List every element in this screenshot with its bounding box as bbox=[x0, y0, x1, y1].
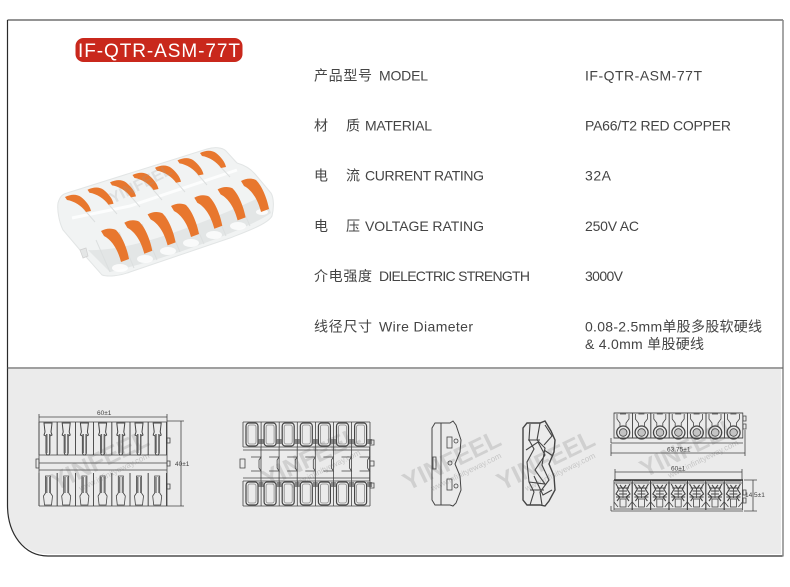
spec row: current rating: CURRENT RATING bbox=[365, 168, 484, 184]
watermark 5: www.infinityeway.com bbox=[666, 438, 740, 480]
drawing: section view bbox=[523, 421, 555, 506]
spec row: dielectric strength bbox=[314, 268, 624, 284]
spec row: voltage rating: VOLTAGE RATING bbox=[365, 218, 484, 234]
title badge: IF-QTR-ASM-77T bbox=[78, 41, 240, 62]
spec row: voltage rating: 电 bbox=[314, 218, 328, 234]
product photo: transparent connector bbox=[58, 148, 273, 276]
spec row: current rating bbox=[314, 168, 612, 184]
spec row: dielectric strength: 3000V bbox=[585, 268, 624, 284]
drawing: top view with dimensions bbox=[36, 410, 190, 506]
watermark 3: www.infinityeway.com bbox=[429, 451, 503, 493]
width dimension: 60±1 bbox=[671, 466, 686, 472]
spec row: voltage rating: 250V AC bbox=[585, 218, 639, 234]
spec row: wire diameter: Wire Diameter bbox=[379, 318, 473, 334]
spec row: wire diameter: & 4.0mm 单股硬线 bbox=[585, 336, 704, 352]
spec row: material bbox=[314, 118, 731, 134]
height dimension bbox=[167, 421, 190, 506]
spec row: voltage rating bbox=[314, 218, 639, 234]
spec row: material: 质 bbox=[346, 118, 360, 134]
front row orange levers bbox=[101, 179, 269, 262]
watermark 2: YINFEEL bbox=[257, 422, 365, 493]
watermark 5: YINFEEL bbox=[635, 412, 743, 483]
drawing: front elevation with dimension bbox=[611, 413, 746, 456]
spec row: model: 产品型号 bbox=[314, 68, 372, 84]
spec row: model bbox=[314, 68, 702, 84]
row groove bbox=[72, 170, 237, 218]
spec row: model: IF-QTR-ASM-77T bbox=[585, 68, 702, 84]
rear row orange levers bbox=[65, 151, 226, 212]
watermark 4: YINFEEL bbox=[492, 425, 600, 496]
photo watermark: YINFEEL bbox=[107, 162, 175, 208]
height dimension: 40±1 bbox=[175, 461, 190, 468]
drawing: side view bbox=[432, 421, 461, 506]
lower shading bbox=[88, 195, 271, 272]
width dimension bbox=[615, 466, 742, 480]
spec row: voltage rating: 压 bbox=[346, 218, 360, 234]
spec row: dielectric strength: DIELECTRIC STRENGTH bbox=[379, 268, 530, 284]
drawing: bottom view bbox=[240, 422, 374, 506]
watermark 1: YINFEEL bbox=[46, 425, 154, 496]
height dimension bbox=[744, 480, 765, 511]
spec row: model: MODEL bbox=[379, 68, 428, 84]
locking tab bbox=[80, 248, 88, 258]
spec row: material: 材 bbox=[314, 118, 328, 134]
spec row: wire diameter: 0.08-2.5mm单股多股软硬线 bbox=[585, 318, 762, 334]
spec row: wire diameter bbox=[314, 318, 762, 352]
watermark 3: YINFEEL bbox=[398, 425, 506, 496]
watermark 2: www.infinityeway.com bbox=[288, 448, 362, 490]
spec row: current rating: 流 bbox=[346, 168, 360, 184]
width dimension bbox=[39, 410, 167, 422]
spec row: material: PA66/T2 RED COPPER bbox=[585, 118, 731, 134]
spec row: current rating: 电 bbox=[314, 168, 328, 184]
spec row: wire diameter: 线径尺寸 bbox=[314, 318, 372, 334]
spec row: material: MATERIAL bbox=[365, 118, 432, 134]
length dimension: 63.75±1 bbox=[667, 446, 691, 454]
height dimension: 14.5±1 bbox=[745, 492, 765, 499]
watermark 4: www.infinityeway.com bbox=[523, 451, 597, 493]
drawing: rear elevation with dimensions bbox=[611, 466, 765, 511]
watermark 1: www.infinityeway.com bbox=[77, 451, 151, 493]
width dimension: 60±1 bbox=[97, 410, 112, 417]
spec row: current rating: 32A bbox=[585, 168, 612, 184]
connector body bbox=[58, 148, 273, 276]
panel: drawings background bbox=[8, 369, 781, 554]
spec row: dielectric strength: 介电强度 bbox=[314, 268, 372, 284]
